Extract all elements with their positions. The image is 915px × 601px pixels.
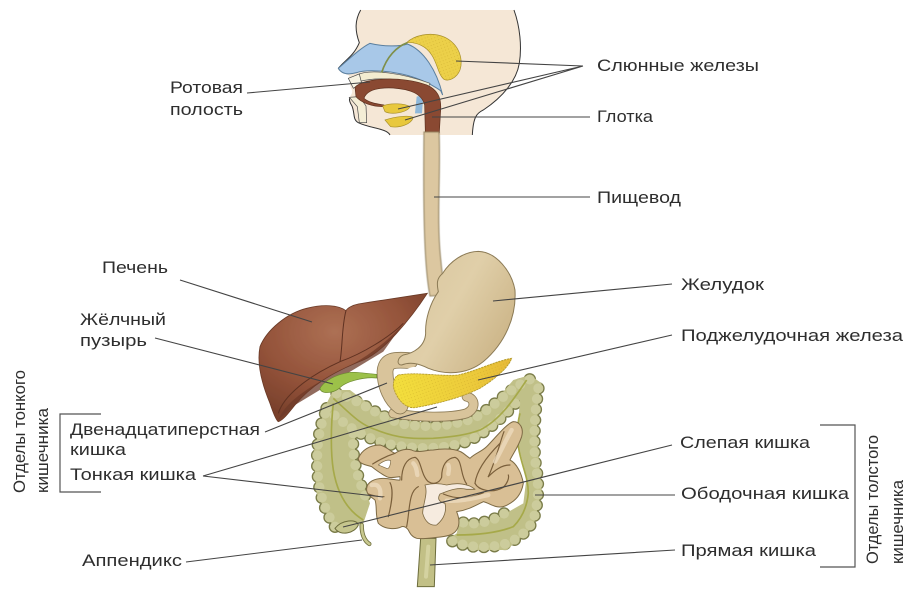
creases	[368, 432, 510, 527]
stomach	[398, 251, 515, 373]
label: colon: Ободочная кишка	[681, 485, 850, 503]
white gaps	[378, 460, 391, 469]
labels: oral cavity: Ротовая	[170, 79, 243, 97]
label: salivary glands: Слюнные железы	[597, 57, 759, 75]
label: esophagus: Пищевод	[597, 189, 681, 207]
vertical label: large intestine sections: Отделы толстого	[864, 435, 882, 564]
label: liver: Печень	[102, 259, 168, 277]
colon band	[331, 380, 528, 535]
salivary gland: large	[407, 34, 461, 80]
duodenum and stomach	[259, 251, 515, 422]
vertical label: small intestine sections	[11, 370, 52, 493]
head and mouth	[338, 10, 520, 136]
colon bead outlines	[317, 379, 538, 547]
label: rectum: Прямая кишка	[681, 542, 817, 560]
bracket: small intestine	[60, 414, 101, 492]
label: gallbladder	[80, 311, 166, 350]
bracket: large intestine	[820, 425, 855, 567]
leader lines: mouth and glands	[247, 61, 590, 197]
label: appendix: Аппендикс	[82, 552, 182, 570]
colon body	[313, 375, 542, 550]
esophagus	[424, 132, 446, 296]
teeth and palate	[357, 72, 430, 87]
inner cavity	[423, 484, 475, 525]
appendix	[362, 525, 369, 544]
pharynx and oral cavity	[355, 79, 441, 136]
vertical label: small intestine sections: Отделы тонкого	[11, 370, 29, 493]
label: duodenum: Двенадцатиперстная	[70, 421, 260, 439]
vertical label: large intestine sections	[864, 435, 907, 564]
colon beads	[317, 379, 538, 547]
labels: oral cavity: полость	[170, 101, 243, 119]
rectum	[417, 538, 436, 587]
highlights	[372, 430, 512, 501]
vertical label: large intestine sections: кишечника	[889, 479, 907, 564]
leader lines	[155, 61, 675, 565]
small intestine	[358, 422, 523, 539]
label: cecum: Слепая кишка	[680, 434, 811, 452]
duodenum	[385, 360, 474, 417]
label: duodenum: кишка	[70, 441, 127, 459]
leader lines: stomach and pancreas	[478, 284, 672, 380]
nasal cavity	[338, 43, 443, 95]
label: stomach: Желудок	[681, 276, 765, 294]
label: pancreas: Поджелудочная железа	[681, 327, 904, 345]
white gap under the stomach	[402, 367, 423, 373]
vertical label: small intestine sections: кишечника	[34, 407, 52, 493]
label: gallbladder: пузырь	[80, 332, 147, 350]
label: gallbladder: Жёлчный	[80, 311, 166, 329]
leader lines: small intestine	[186, 383, 437, 562]
liver	[259, 293, 427, 422]
label: pharynx: Глотка	[597, 108, 654, 126]
large intestine	[313, 375, 542, 587]
salivary gland: lower	[383, 104, 410, 113]
label: duodenum	[70, 421, 260, 459]
silhouette	[358, 422, 523, 539]
salivary gland: under tongue	[385, 116, 413, 127]
pancreas	[393, 358, 512, 408]
head silhouette	[338, 10, 520, 135]
gallbladder	[320, 372, 377, 393]
leader lines: liver and gallbladder	[155, 280, 333, 384]
cecum	[335, 521, 358, 533]
label: small intestine: Тонкая кишка	[70, 466, 197, 484]
leader lines: large intestine	[343, 445, 675, 565]
labels: oral cavity	[170, 79, 243, 119]
